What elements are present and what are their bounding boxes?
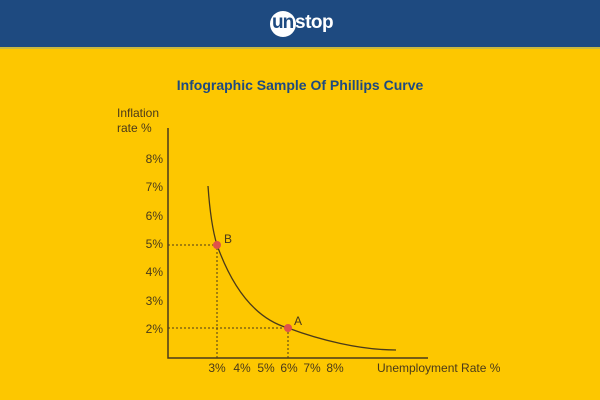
logo: unstop: stop <box>295 12 333 33</box>
y tick labels: 2% <box>146 322 163 336</box>
y tick labels: 6% <box>146 209 163 223</box>
logo: unstop: un <box>272 12 293 33</box>
x tick labels <box>208 361 344 375</box>
point B <box>213 232 232 249</box>
x tick labels: 8% <box>326 361 344 375</box>
y tick labels: 5% <box>146 237 163 251</box>
axes <box>168 128 428 358</box>
y axis label: Inflation <box>117 106 159 120</box>
y tick labels <box>146 152 163 336</box>
dashed guides <box>168 245 288 358</box>
x tick labels: 4% <box>233 361 251 375</box>
point A: A <box>294 314 302 328</box>
y tick labels: 8% <box>146 152 163 166</box>
y tick labels: 7% <box>146 180 163 194</box>
x tick labels: 6% <box>280 361 298 375</box>
point B: B <box>224 232 232 246</box>
point A <box>284 314 302 332</box>
y axis label: rate % <box>117 121 152 135</box>
y tick labels: 3% <box>146 294 163 308</box>
x tick labels: 3% <box>208 361 226 375</box>
title: Infographic Sample Of Phillips Curve <box>177 77 423 93</box>
curve <box>208 186 396 350</box>
y axis label <box>117 106 159 135</box>
logo: unstop <box>270 11 333 37</box>
y tick labels: 4% <box>146 265 163 279</box>
x tick labels: 7% <box>303 361 321 375</box>
x axis label: Unemployment Rate % <box>377 361 501 375</box>
x tick labels: 5% <box>257 361 275 375</box>
header bar <box>0 0 600 49</box>
